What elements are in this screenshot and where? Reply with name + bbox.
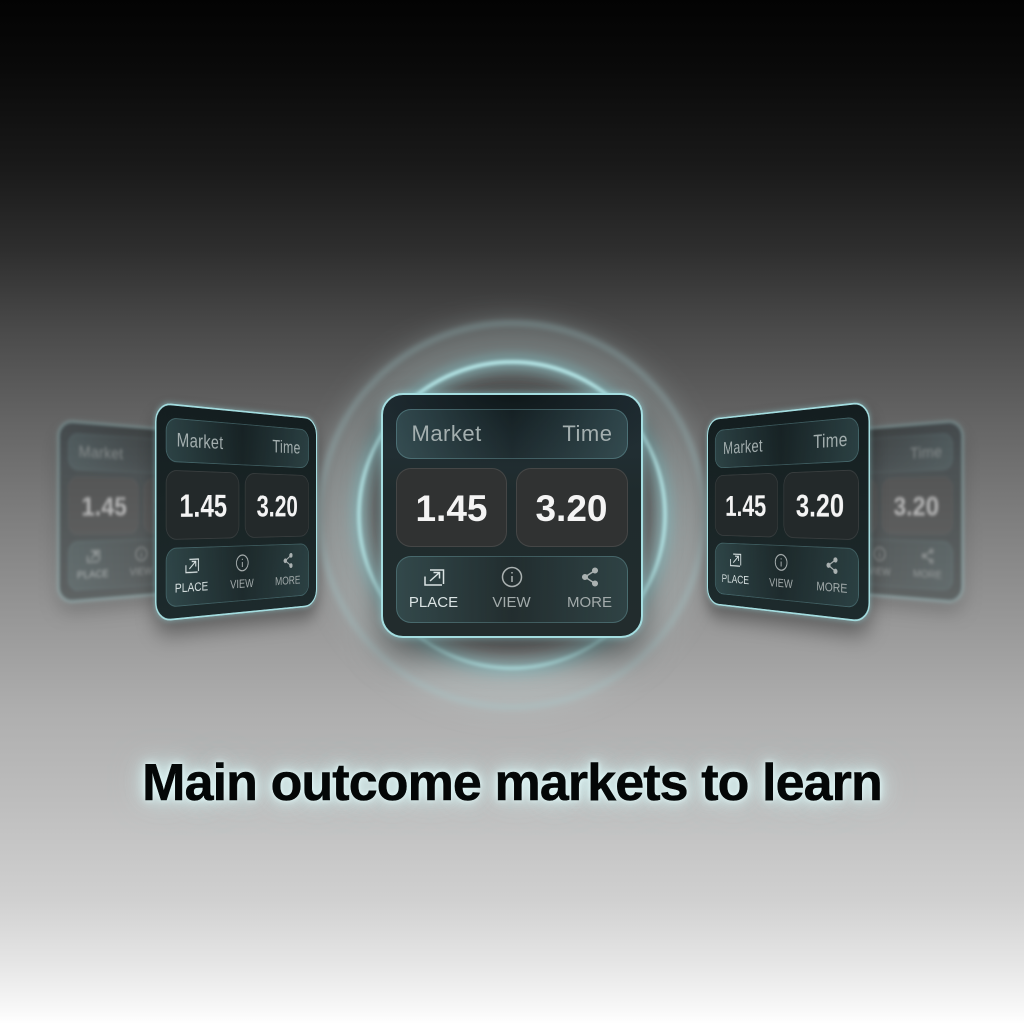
odds 1.45: 1.45	[415, 488, 488, 529]
header bar	[165, 417, 309, 468]
label: more: MORE	[816, 579, 847, 596]
odds cell 2	[783, 469, 859, 540]
far left card: 1.45	[81, 491, 127, 521]
odds cell 2	[516, 468, 628, 546]
icon: share	[826, 557, 838, 574]
far right card: MORE	[913, 567, 942, 581]
label: more: MORE	[275, 573, 300, 589]
far left card: Time	[170, 448, 197, 466]
odds 1.45: 1.45	[179, 488, 227, 524]
action bar	[396, 556, 628, 622]
odds cell 1	[396, 468, 506, 546]
label: market: Market	[177, 429, 223, 453]
label: market: Market	[723, 435, 763, 458]
label: time: Time	[813, 428, 848, 453]
far left card: VIEW	[130, 565, 152, 578]
near right card	[707, 401, 870, 623]
label: place: PLACE	[722, 572, 749, 587]
label: place: PLACE	[409, 594, 458, 611]
odds cell 1	[165, 469, 239, 540]
far left card: 3.20	[155, 493, 195, 521]
icon: info	[236, 554, 249, 572]
label: view: VIEW	[769, 575, 793, 591]
header bar	[715, 416, 859, 468]
icon: share	[284, 553, 292, 568]
far left card: MORE	[173, 563, 197, 575]
far left card: Market	[79, 442, 123, 463]
header bar	[396, 408, 628, 458]
near left card	[155, 402, 317, 622]
label: more: MORE	[567, 594, 612, 611]
far right card: 3.20	[894, 491, 939, 521]
odds cell 2	[244, 472, 309, 538]
far right card: 1.45	[826, 493, 865, 521]
odds 3.20: 3.20	[796, 488, 844, 524]
icon: info	[774, 554, 788, 571]
action bar	[715, 542, 859, 608]
far right card: PLACE	[822, 563, 849, 575]
icon: place	[424, 569, 444, 586]
label: view: VIEW	[230, 576, 254, 592]
odds 3.20: 3.20	[257, 490, 298, 523]
icon: info	[502, 566, 522, 588]
far right card	[808, 420, 963, 603]
label: time: Time	[272, 436, 301, 458]
odds cell 1	[715, 472, 778, 537]
title: Main outcome markets to learn	[142, 754, 882, 812]
odds 3.20: 3.20	[535, 488, 608, 529]
far left card: PLACE	[77, 567, 109, 582]
label: view: VIEW	[492, 594, 531, 611]
far right card: Time	[910, 442, 942, 462]
icon: share	[582, 568, 598, 586]
odds 1.45: 1.45	[725, 489, 766, 523]
far right card: Market	[824, 447, 862, 466]
label: place: PLACE	[175, 579, 208, 596]
main center card	[381, 393, 643, 638]
label: time: Time	[562, 421, 612, 446]
icon: place	[730, 553, 742, 567]
far right card: VIEW	[868, 565, 891, 578]
action bar	[165, 543, 309, 607]
icon: place	[185, 558, 200, 574]
label: market: Market	[412, 421, 482, 446]
far left card	[58, 420, 213, 603]
